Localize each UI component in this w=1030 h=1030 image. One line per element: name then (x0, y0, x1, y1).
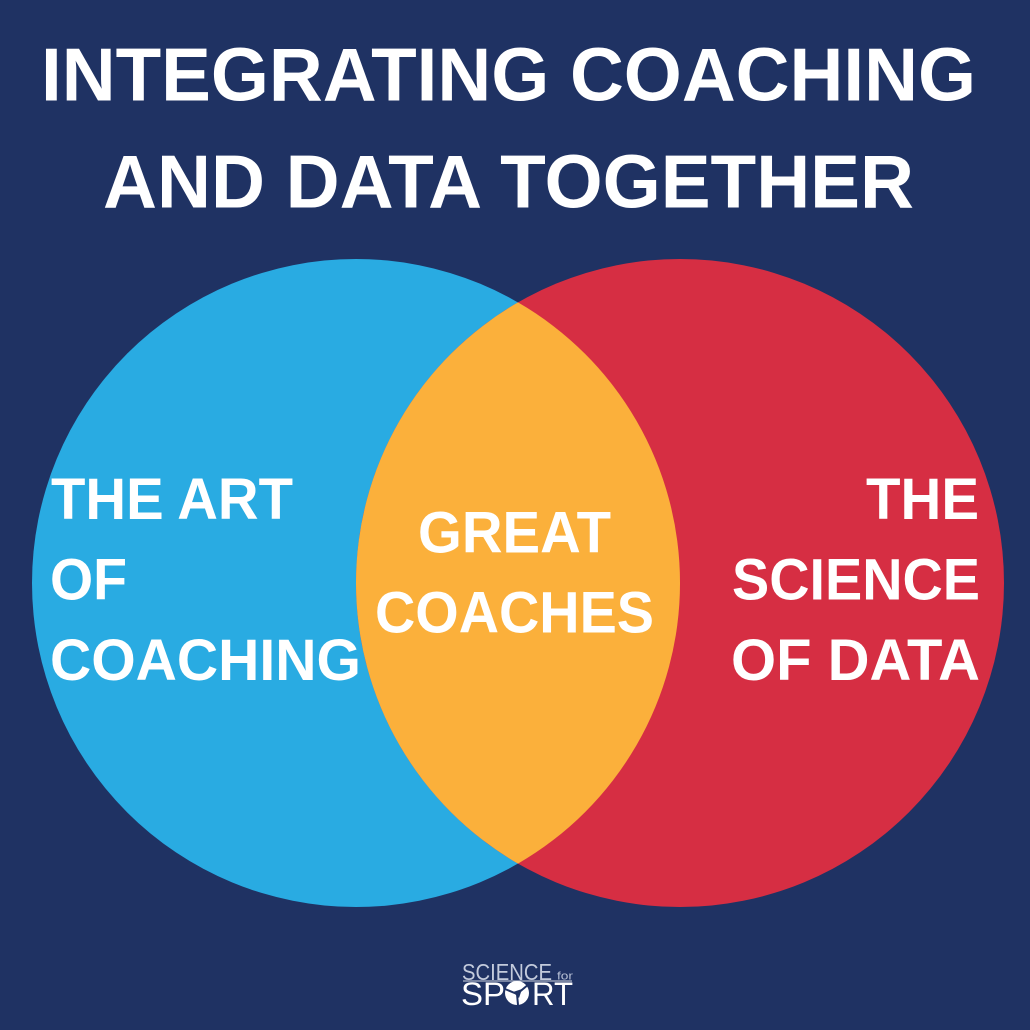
label: great coaches (375, 500, 654, 646)
title: INTEGRATING COACHING (41, 32, 976, 116)
logo: science for sport: SP (461, 976, 505, 1012)
title: AND DATA TOGETHER (103, 139, 914, 223)
logo: science for sport: RT (532, 976, 573, 1012)
label: great coaches: GREAT (418, 500, 611, 566)
title (41, 32, 976, 223)
label: the science of data: OF DATA (731, 628, 980, 693)
icon: ball (505, 981, 529, 1005)
label: the art of coaching (50, 467, 361, 693)
label: the science of data: THE (866, 467, 979, 532)
label: the science of data: SCIENCE (732, 548, 980, 612)
label: the art of coaching: COACHING (50, 628, 361, 693)
label: the science of data (731, 467, 980, 693)
logo: science for sport (461, 959, 573, 1012)
logo: science for sport: SCIENCE (462, 959, 552, 985)
circle: art of coaching (32, 259, 680, 907)
label: great coaches: COACHES (375, 580, 654, 646)
logo: science for sport: for (557, 970, 573, 982)
circle: science of data (356, 259, 1004, 907)
label: the art of coaching: OF (50, 548, 127, 612)
venn diagram (32, 259, 1004, 907)
overlap: great coaches (356, 302, 680, 864)
label: the art of coaching: THE ART (51, 467, 293, 532)
